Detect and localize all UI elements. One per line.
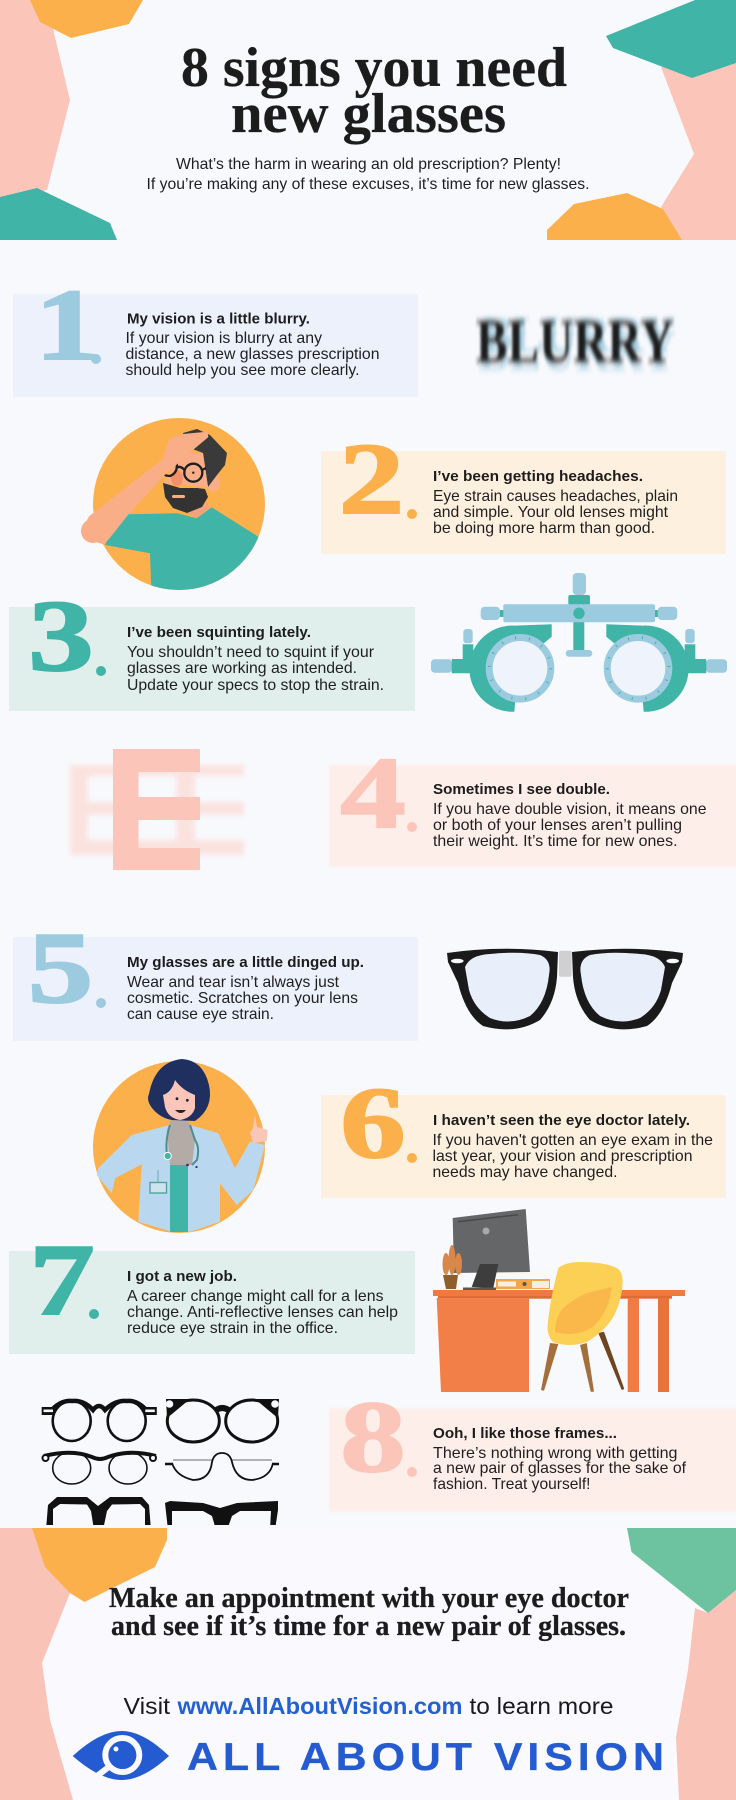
- image: blurry text: BLURRY: [476, 308, 674, 376]
- title: new glasses: [231, 83, 506, 145]
- panel: sign 8: [329, 1381, 736, 1512]
- number 3: 3: [28, 580, 94, 693]
- body 3: Update your specs to stop the strain.: [127, 677, 384, 694]
- number 4: 4: [340, 737, 406, 850]
- logo eye: [73, 1731, 169, 1780]
- body 3: glasses are working as intended.: [127, 660, 357, 677]
- neck and scrub collar: [167, 1117, 195, 1165]
- decorative shape: teal top right: [606, 0, 736, 78]
- plant: [442, 1245, 462, 1275]
- website line: Visit: [124, 1693, 171, 1719]
- heading 5: My glasses are a little dinged up.: [127, 954, 364, 971]
- illustration: office desk: [433, 1209, 685, 1392]
- body 2: Eye strain causes headaches, plain: [433, 488, 678, 505]
- panel: sign 7: [9, 1224, 415, 1354]
- number 5: 5: [28, 912, 93, 1025]
- decorative shape: pink right: [676, 1590, 736, 1800]
- heading 4: Sometimes I see double.: [433, 781, 610, 798]
- body 1: distance, a new glasses prescription: [126, 346, 380, 363]
- body 4: [433, 801, 707, 850]
- body 4: If you have double vision, it means one: [433, 801, 707, 818]
- call to action: and see if it’s time for a new pair of glasses.: [111, 1610, 626, 1642]
- illustration: assorted frames: [42, 1399, 279, 1530]
- number 8: 8: [340, 1381, 406, 1494]
- solid letter: [113, 749, 200, 870]
- body 6: If you haven't gotten an eye exam in the: [432, 1132, 713, 1149]
- desk: [433, 1290, 685, 1296]
- body 6: needs may have changed.: [432, 1164, 618, 1181]
- panel: sign 2: [321, 423, 726, 554]
- body 7: reduce eye strain in the office.: [127, 1320, 338, 1337]
- ear: [206, 472, 220, 492]
- heading 2: I’ve been getting headaches.: [433, 468, 643, 485]
- beard: [163, 483, 208, 513]
- panel: sign 1: [13, 269, 418, 397]
- logo wordmark: ALL ABOUT VISION: [187, 1735, 664, 1779]
- glasses: [163, 463, 206, 482]
- shirt: [105, 507, 258, 590]
- number 2: 2: [339, 423, 404, 536]
- hair: [148, 1059, 210, 1121]
- number 1: 1: [35, 269, 100, 382]
- header panel: [0, 0, 736, 240]
- body 2: [433, 488, 678, 537]
- chair legs: [541, 1343, 558, 1391]
- decorative shape: pink left: [0, 0, 70, 200]
- decorative shape: orange bottom right: [547, 193, 682, 240]
- body 7: change. Anti-reflective lenses can help: [127, 1304, 398, 1321]
- body 1: [126, 330, 380, 379]
- chair: [548, 1262, 623, 1345]
- monitor: [453, 1209, 530, 1273]
- body 1: If your vision is blurry at any: [126, 330, 322, 347]
- face: [163, 453, 208, 487]
- logo: [73, 1731, 664, 1780]
- title: [181, 37, 567, 145]
- frames row 2: [42, 1452, 279, 1484]
- number 6: 6: [340, 1067, 406, 1180]
- frames row 3: [46, 1497, 278, 1525]
- body 2: be doing more harm than good.: [433, 520, 655, 537]
- panel: sign 4: [329, 737, 736, 867]
- stethoscope: [166, 1125, 198, 1165]
- decorative shape: teal bottom left: [0, 188, 117, 240]
- body 2: and simple. Your old lenses might: [433, 504, 669, 521]
- face: [163, 1080, 195, 1120]
- badge: [150, 1170, 166, 1193]
- body 7: A career change might call for a lens: [127, 1288, 384, 1305]
- decorative shape: green: [627, 1528, 736, 1613]
- body 5: [127, 974, 358, 1023]
- body 3: You shouldn’t need to squint if your: [127, 644, 375, 661]
- body 3: [127, 644, 384, 694]
- intro text: What’s the harm in wearing an old prescription? Plenty!: [176, 156, 561, 173]
- heading 1: My vision is a little blurry.: [127, 310, 310, 328]
- heading 7: I got a new job.: [127, 1268, 237, 1285]
- body 5: Wear and tear isn’t always just: [127, 974, 340, 991]
- illustration: doctor: [93, 1059, 268, 1233]
- footer panel: [0, 1528, 736, 1800]
- illustration: trial frame: [431, 573, 727, 712]
- neck: [187, 503, 210, 518]
- call to action: Make an appointment with your eye doctor: [109, 1582, 629, 1614]
- body 8: There’s nothing wrong with getting: [433, 1445, 678, 1462]
- title: 8 signs you need: [181, 37, 567, 99]
- intro text: [146, 156, 590, 193]
- heading 6: I haven’t seen the eye doctor lately.: [433, 1112, 690, 1129]
- heading 8: Ooh, I like those frames...: [433, 1425, 617, 1442]
- eyes and smile: [175, 1097, 189, 1113]
- decorative shape: orange top: [30, 0, 143, 38]
- body 6: last year, your vision and prescription: [432, 1148, 692, 1165]
- ghost letters: [70, 765, 244, 855]
- body 4: or both of your lenses aren’t pulling: [433, 817, 682, 834]
- arm: [81, 433, 207, 543]
- frames row 1: [42, 1399, 279, 1442]
- illustration: man with headache: [80, 418, 265, 590]
- books: [496, 1279, 550, 1289]
- call to action: [109, 1582, 629, 1642]
- image: blurry text: BLURRY: [482, 307, 676, 364]
- decorative shape: orange: [32, 1528, 167, 1602]
- body 5: can cause eye strain.: [127, 1006, 274, 1023]
- panel: sign 5: [13, 912, 418, 1041]
- decorative shape: pink right: [661, 57, 736, 240]
- image: blurry text: BLURRY: [478, 318, 676, 383]
- website line: [124, 1693, 614, 1719]
- scrubs: [170, 1163, 188, 1232]
- website line: to learn more: [470, 1693, 614, 1719]
- body 8: a new pair of glasses for the sake of: [433, 1460, 687, 1477]
- number 7: 7: [29, 1224, 95, 1337]
- body 6: [432, 1132, 713, 1181]
- panel: sign 3: [9, 580, 415, 711]
- website line: www.AllAboutVision.com: [176, 1693, 462, 1719]
- hair: [183, 429, 227, 487]
- heading 3: I’ve been squinting lately.: [127, 624, 311, 641]
- body 8: [433, 1445, 687, 1493]
- coat: [97, 1125, 265, 1232]
- body 5: cosmetic. Scratches on your lens: [127, 990, 358, 1007]
- body 1: should help you see more clearly.: [126, 362, 360, 379]
- illustration: wayfarer glasses: [447, 949, 683, 1029]
- hand: [250, 1115, 268, 1143]
- intro text: If you’re making any of these excuses, it’s time for new glasses.: [146, 176, 590, 193]
- illustration: double vision E: [70, 749, 244, 870]
- panel: sign 6: [321, 1067, 726, 1198]
- body 4: their weight. It’s time for new ones.: [433, 833, 678, 850]
- decorative shape: pink left: [0, 1528, 73, 1800]
- body 8: fashion. Treat yourself!: [433, 1476, 590, 1493]
- body 7: [127, 1288, 398, 1337]
